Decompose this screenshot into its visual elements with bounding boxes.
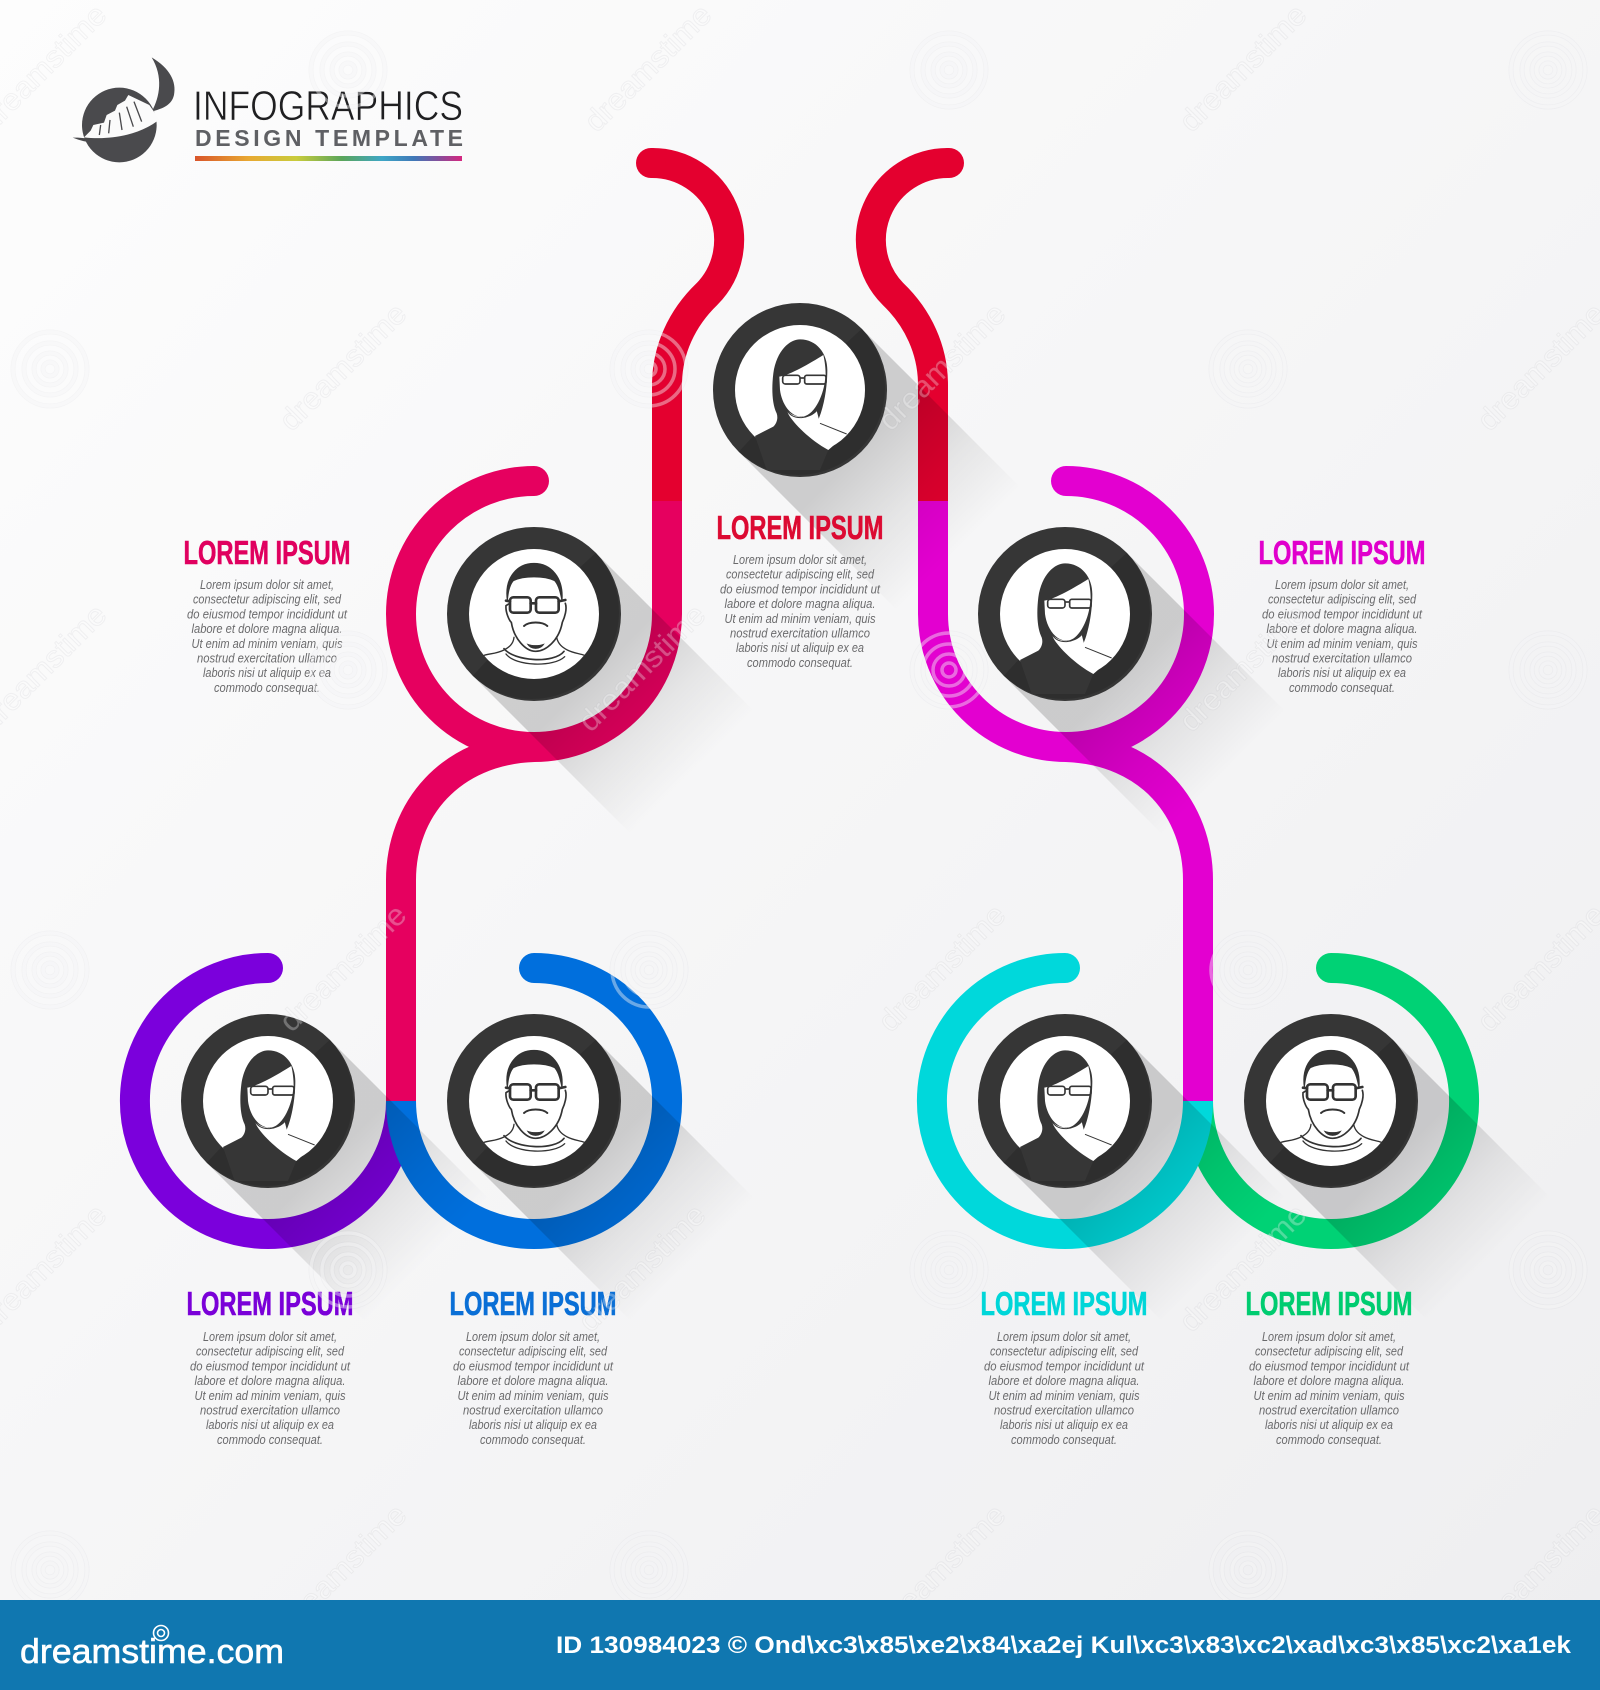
heading: magenta: LOREM IPSUM (1258, 534, 1426, 571)
footer credit: ID 130984023 © Ond\xc3\x85\xe2\x84\xa2ej Kul\xc3\x83\xc2\xad\xc3\x85\xc2\xa1ek (556, 1632, 1572, 1659)
heading: pink: LOREM IPSUM (184, 534, 350, 571)
icon: footer spiral (154, 1626, 168, 1640)
text block: magenta: do eiusmod tempor incididunt ut (1262, 607, 1422, 621)
text block: magenta (1262, 578, 1422, 695)
avatar: left man (447, 527, 621, 701)
watermark text: dreamstime (578, 0, 718, 138)
watermark text: dreamstime (273, 297, 413, 437)
left red cap (636, 148, 666, 178)
text block: pink: nostrud exercitation ullamco (197, 652, 337, 666)
watermark text: dreamstime (1173, 0, 1313, 138)
heading: green: LOREM IPSUM (1246, 1285, 1412, 1322)
text block: cyan: nostrud exercitation ullamco (994, 1404, 1134, 1418)
text block: cyan: Ut enim ad minim veniam, quis (988, 1389, 1140, 1403)
purple ring (135, 968, 401, 1234)
watermark text: dreamstime (572, 1198, 712, 1338)
text block: blue: nostrud exercitation ullamco (463, 1404, 603, 1418)
watermark text: dreamstime (872, 297, 1012, 437)
text block: cyan: Lorem ipsum dolor sit amet, (997, 1330, 1131, 1344)
watermark text: dreamstime (273, 898, 413, 1038)
watermark text: dreamstime (1173, 598, 1313, 738)
text block: purple: commodo consequat. (217, 1433, 323, 1447)
pink ring (401, 481, 667, 747)
text block: magenta: Lorem ipsum dolor sit amet, (1275, 578, 1409, 592)
text block: magenta: consectetur adipiscing elit, sed (1268, 593, 1417, 607)
text block: green: labore et dolore magna aliqua. (1254, 1374, 1404, 1388)
text block: purple: laboris nisi ut aliquip ex ea (206, 1418, 334, 1432)
text block: red: nostrud exercitation ullamco (730, 626, 870, 640)
watermark text: dreamstime (572, 598, 712, 738)
right red stem (871, 163, 949, 501)
text block: pink: Ut enim ad minim veniam, quis (192, 637, 342, 651)
watermark text: dreamstime (1173, 1198, 1313, 1338)
watermark text: dreamstime (273, 1498, 413, 1638)
heading: purple: LOREM IPSUM (186, 1285, 354, 1322)
watermark text: dreamstime (872, 1498, 1012, 1638)
text block: red: labore et dolore magna aliqua. (724, 597, 876, 611)
text block: red: Lorem ipsum dolor sit amet, (733, 553, 867, 567)
magenta branch (1066, 747, 1198, 1101)
text block: cyan: do eiusmod tempor incididunt ut (984, 1359, 1144, 1373)
avatar: bottom man (447, 1014, 621, 1188)
text block: pink: consectetur adipiscing elit, sed (193, 593, 342, 607)
logo icon (73, 57, 175, 162)
text block: red: laboris nisi ut aliquip ex ea (736, 641, 864, 655)
text block: purple: labore et dolore magna aliqua. (194, 1374, 346, 1388)
text block: pink: Lorem ipsum dolor sit amet, (200, 578, 334, 592)
text block: green (1249, 1330, 1409, 1447)
text block: cyan (984, 1330, 1144, 1447)
cyan ring (932, 968, 1198, 1234)
text block: blue (453, 1330, 613, 1447)
text block: purple: consectetur adipiscing elit, sed (196, 1345, 345, 1359)
text block: blue: labore et dolore magna aliqua. (458, 1374, 608, 1388)
text block: red: commodo consequat. (747, 656, 853, 670)
text block: cyan: commodo consequat. (1011, 1433, 1117, 1447)
text block: purple (190, 1330, 350, 1447)
text block: pink: commodo consequat. (214, 681, 320, 695)
text block: magenta: laboris nisi ut aliquip ex ea (1278, 666, 1406, 680)
text block: magenta: commodo consequat. (1289, 681, 1395, 695)
footer brand: dreamstime.com (20, 1633, 284, 1671)
text block: green: commodo consequat. (1276, 1433, 1382, 1447)
text block: blue: commodo consequat. (480, 1433, 586, 1447)
heading: cyan: LOREM IPSUM (980, 1285, 1148, 1322)
magenta ring (933, 481, 1199, 747)
long shadows (206, 328, 1552, 1322)
avatar: bottom woman (978, 1014, 1152, 1188)
text block: blue: Ut enim ad minim veniam, quis (458, 1389, 608, 1403)
text block: pink: laboris nisi ut aliquip ex ea (203, 666, 331, 680)
text block: cyan: consectetur adipiscing elit, sed (990, 1345, 1139, 1359)
text block: green: laboris nisi ut aliquip ex ea (1265, 1418, 1393, 1432)
text block: blue: consectetur adipiscing elit, sed (459, 1345, 608, 1359)
avatar: bottom-right man (1244, 1014, 1418, 1188)
logo subtitle: DESIGN TEMPLATE (195, 125, 463, 151)
pink branch (401, 747, 534, 1101)
text block: green: Ut enim ad minim veniam, quis (1254, 1389, 1404, 1403)
text block: red: do eiusmod tempor incididunt ut (720, 582, 880, 596)
text block: green: Lorem ipsum dolor sit amet, (1262, 1330, 1396, 1344)
text block: cyan: laboris nisi ut aliquip ex ea (1000, 1418, 1128, 1432)
text block: purple: nostrud exercitation ullamco (200, 1404, 340, 1418)
text block: purple: Lorem ipsum dolor sit amet, (203, 1330, 337, 1344)
text block: green: nostrud exercitation ullamco (1259, 1404, 1399, 1418)
watermark text: dreamstime (872, 898, 1012, 1038)
flow lines (135, 148, 1464, 1234)
text block: purple: do eiusmod tempor incididunt ut (190, 1359, 350, 1373)
text block: red: consectetur adipiscing elit, sed (726, 568, 875, 582)
text block: magenta: labore et dolore magna aliqua. (1266, 622, 1418, 636)
text block: magenta: nostrud exercitation ullamco (1272, 652, 1412, 666)
right red cap (934, 148, 964, 178)
text block: blue: Lorem ipsum dolor sit amet, (466, 1330, 600, 1344)
footer bar (0, 1600, 1600, 1690)
text block: purple: Ut enim ad minim veniam, quis (194, 1389, 346, 1403)
text block: blue: do eiusmod tempor incididunt ut (453, 1359, 613, 1373)
text block: red (720, 553, 880, 670)
avatar: right woman (978, 527, 1152, 701)
text block: magenta: Ut enim ad minim veniam, quis (1266, 637, 1418, 651)
avatar: top woman (713, 303, 887, 477)
text block: red: Ut enim ad minim veniam, quis (724, 612, 876, 626)
text block: cyan: labore et dolore magna aliqua. (988, 1374, 1140, 1388)
text block: pink (187, 578, 347, 695)
heading: red: LOREM IPSUM (716, 509, 884, 546)
text block: pink: do eiusmod tempor incididunt ut (187, 607, 347, 621)
logo title: INFOGRAPHICS (193, 82, 463, 129)
text block: blue: laboris nisi ut aliquip ex ea (469, 1418, 597, 1432)
text block: green: do eiusmod tempor incididunt ut (1249, 1359, 1409, 1373)
green ring (1198, 968, 1464, 1234)
text block: green: consectetur adipiscing elit, sed (1255, 1345, 1404, 1359)
heading: blue: LOREM IPSUM (450, 1285, 616, 1322)
blue ring (401, 968, 667, 1234)
rainbow underline (195, 156, 462, 161)
text block: pink: labore et dolore magna aliqua. (192, 622, 342, 636)
avatar: bottom-left woman (181, 1014, 355, 1188)
left red stem (651, 163, 729, 501)
